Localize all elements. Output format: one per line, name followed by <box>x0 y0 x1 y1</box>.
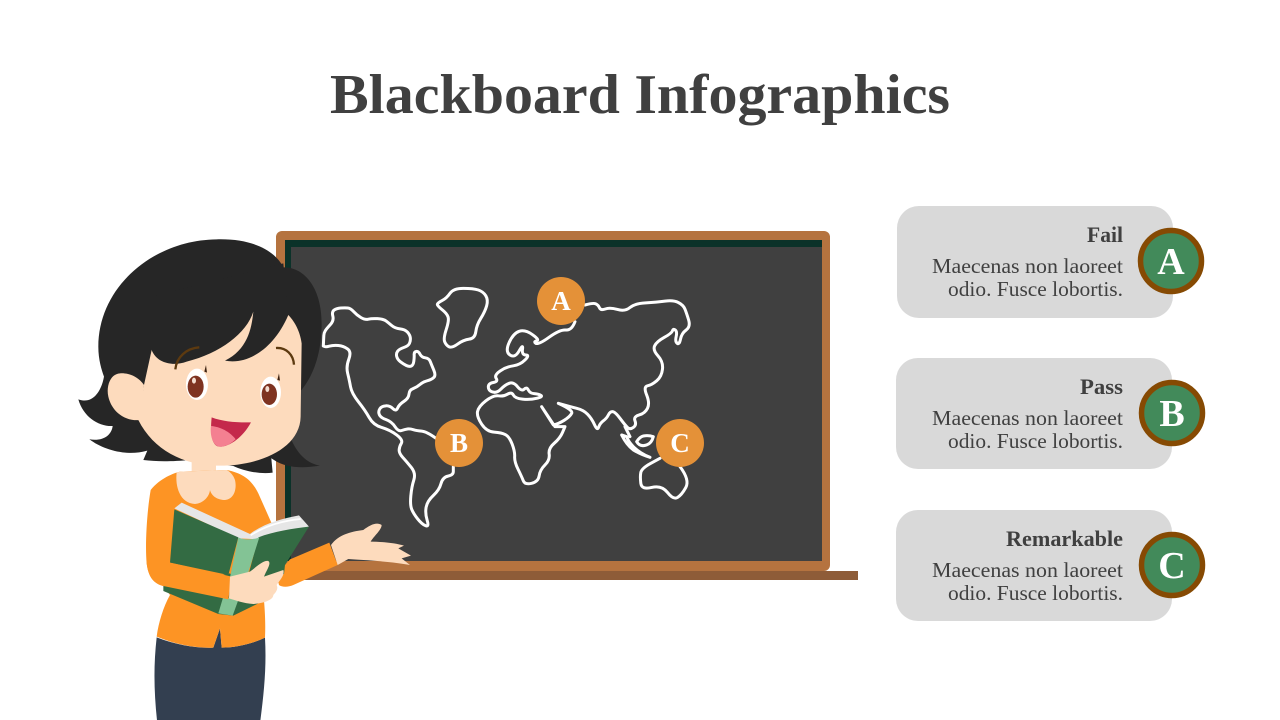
mouth <box>211 417 251 447</box>
book back cover <box>163 573 258 616</box>
card: Fail <box>897 206 1202 318</box>
hair fringe <box>152 263 288 364</box>
card body: odio. Fusce lobortis. <box>948 581 1123 605</box>
australia outline <box>640 458 687 498</box>
blackboard <box>276 231 858 580</box>
hand on book <box>229 561 284 604</box>
americas outline <box>323 308 453 526</box>
right eye <box>260 373 281 408</box>
card heading: Pass <box>1080 374 1123 399</box>
teacher head <box>78 239 322 473</box>
collar <box>176 470 236 504</box>
badge B <box>1142 382 1202 444</box>
indonesia islands outline <box>622 427 653 457</box>
card: Pass <box>896 358 1202 469</box>
card background <box>897 206 1173 318</box>
left eye <box>186 365 208 400</box>
card: Remarkable <box>896 510 1202 621</box>
face <box>138 297 302 466</box>
greenland outline <box>437 288 487 347</box>
map marker B: B <box>450 428 468 458</box>
world map <box>323 288 689 526</box>
teacher character <box>78 239 411 720</box>
neck <box>192 457 216 477</box>
map marker A: A <box>551 286 571 316</box>
badge A <box>1140 230 1202 292</box>
tongue <box>211 426 236 447</box>
card body: Maecenas non laoreet <box>932 406 1123 430</box>
badge B: B <box>1159 393 1185 435</box>
pointing hand <box>331 524 411 565</box>
pointing sleeve <box>277 543 338 587</box>
blouse <box>146 470 272 648</box>
badge C: C <box>1158 545 1186 587</box>
map marker B <box>435 419 483 467</box>
right eyebrow <box>276 348 294 365</box>
left eyebrow <box>175 347 199 369</box>
book page highlight <box>251 519 301 535</box>
forearm holding book <box>147 509 232 599</box>
card body: odio. Fusce lobortis. <box>948 277 1123 301</box>
book <box>163 503 309 616</box>
title: Blackboard Infographics <box>330 64 950 126</box>
ear <box>108 373 144 420</box>
skirt <box>154 628 265 720</box>
board shelf <box>300 571 858 580</box>
map marker C <box>656 419 704 467</box>
badge C <box>1142 534 1202 596</box>
book right cover <box>247 527 309 582</box>
board inner edge <box>285 240 822 561</box>
card body: Maecenas non laoreet <box>932 254 1123 278</box>
card body: odio. Fusce lobortis. <box>948 429 1123 453</box>
map marker C: C <box>670 428 690 458</box>
card heading: Remarkable <box>1006 526 1123 551</box>
card body <box>932 254 1123 301</box>
book lower spine <box>218 597 238 616</box>
badge A: A <box>1157 241 1185 283</box>
book spine <box>230 537 259 577</box>
hair back <box>78 239 322 473</box>
book pages <box>174 503 309 539</box>
map marker A <box>537 277 585 325</box>
card heading: Fail <box>1087 222 1123 247</box>
card background <box>896 510 1172 621</box>
teacher body <box>146 457 411 720</box>
card background <box>896 358 1172 469</box>
card body <box>932 406 1123 453</box>
board surface <box>291 247 822 561</box>
card body: Maecenas non laoreet <box>932 558 1123 582</box>
eurasia and africa outline <box>477 301 689 484</box>
board frame <box>276 231 830 571</box>
book left cover <box>170 509 238 575</box>
card body <box>932 558 1123 605</box>
